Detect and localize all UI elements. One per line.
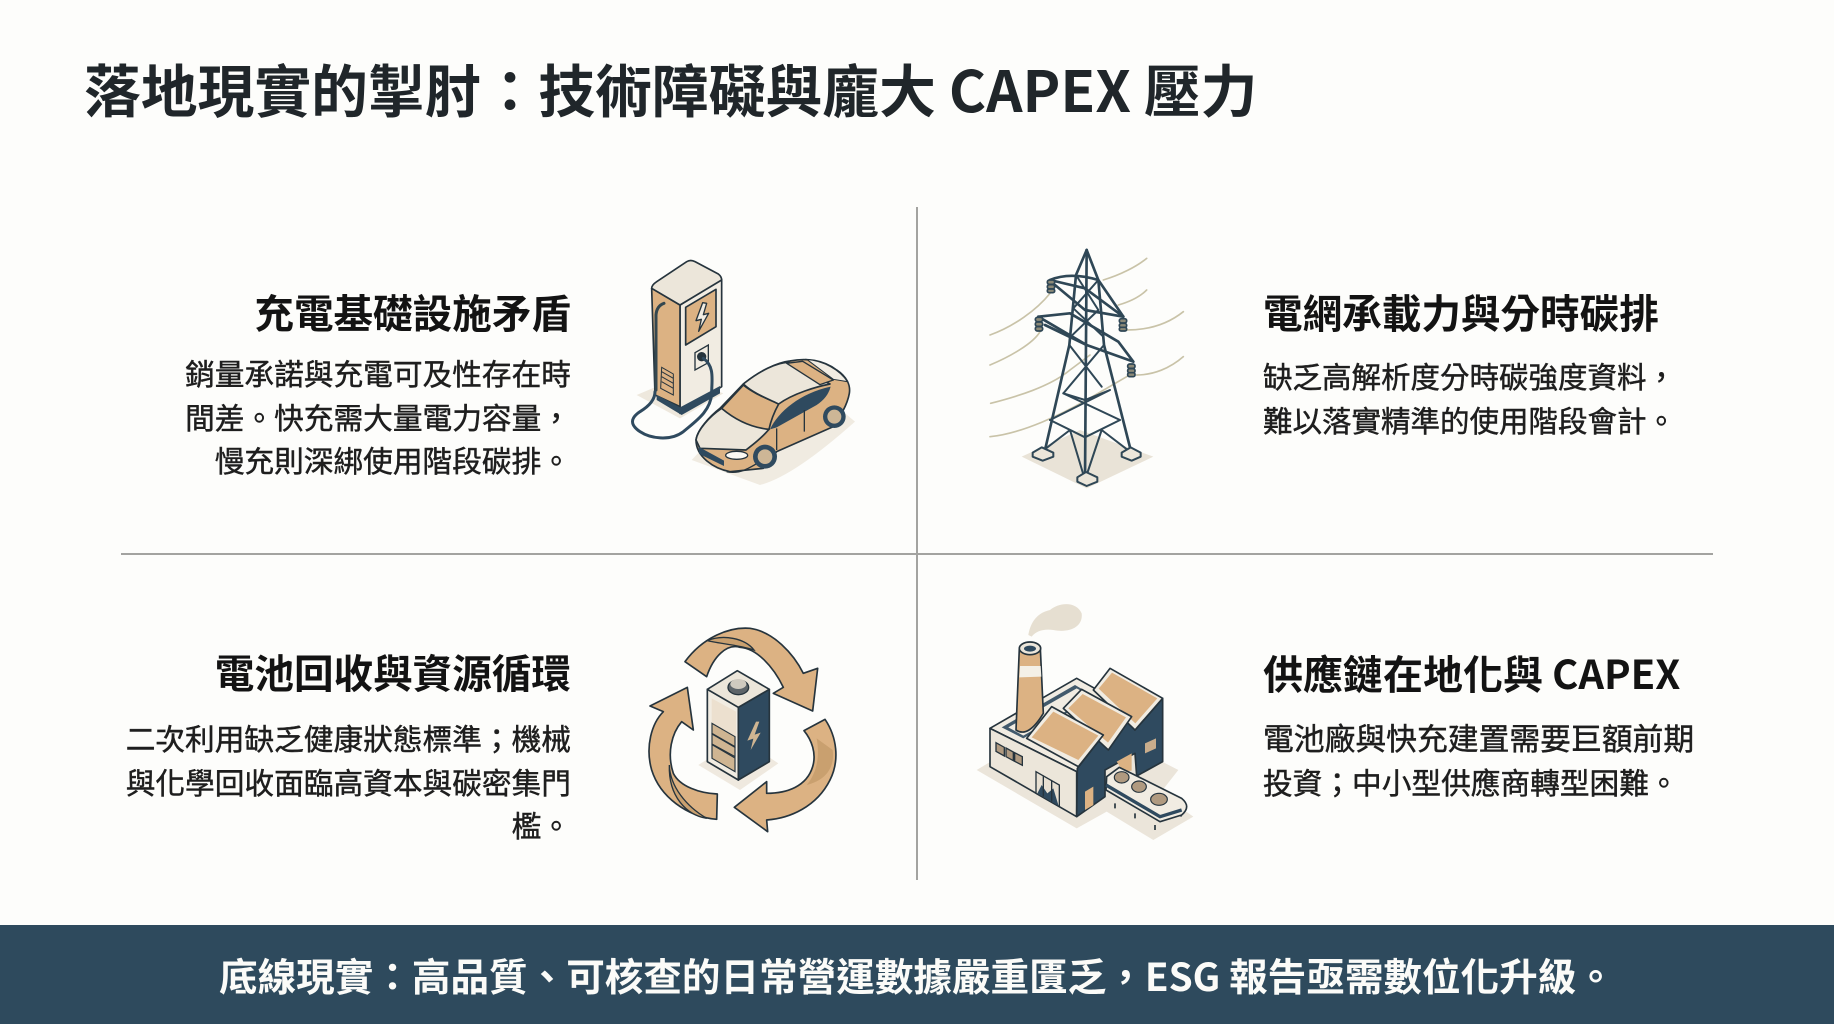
panel: charging infrastructure (185, 260, 855, 485)
text: charging: 間差。快充需大量電力容量， (185, 394, 571, 438)
text: supply chain: 電池廠與快充建置需要巨額前期 (1263, 714, 1694, 759)
text: grid: 難以落實精準的使用階段會計。 (1263, 398, 1676, 440)
text: grid: 缺乏高解析度分時碳強度資料， (1263, 355, 1676, 397)
footer text: 底線現實：高品質、可核查的日常營運數據嚴重匱乏，ESG 報告亟需數位化升級。 (219, 947, 1615, 1003)
vertical divider (916, 207, 918, 880)
heading: supply chain: 供應鏈在地化與 CAPEX (1263, 643, 1680, 701)
panel: supply chain localization (977, 604, 1694, 840)
heading: grid: 電網承載力與分時碳排 (1263, 283, 1659, 340)
text: charging: 慢充則深綁使用階段碳排。 (215, 438, 571, 481)
text: recycling: 與化學回收面臨高資本與碳密集門 (126, 760, 571, 802)
text: recycling (126, 716, 571, 846)
title: 落地現實的掣肘：技術障礙與龐大 CAPEX 壓力 (84, 47, 1257, 129)
text: charging (185, 351, 571, 481)
text: supply chain: 投資；中小型供應商轉型困難。 (1263, 760, 1679, 802)
icon: battery with recycling arrows (648, 627, 837, 832)
footer banner (0, 925, 1834, 1024)
panel: grid capacity (989, 248, 1676, 488)
text: grid (1263, 355, 1676, 440)
text: recycling: 檻。 (512, 803, 571, 846)
text: recycling: 二次利用缺乏健康狀態標準；機械 (126, 716, 571, 759)
heading: recycling: 電池回收與資源循環 (215, 643, 571, 700)
icon: factory with conveyor (977, 604, 1193, 840)
icon: transmission tower (989, 248, 1184, 488)
panel: battery recycling (126, 627, 837, 846)
text: supply chain (1263, 714, 1694, 802)
icon: EV charger and car (631, 260, 855, 485)
heading: charging: 充電基礎設施矛盾 (254, 283, 571, 340)
horizontal divider (121, 553, 1713, 555)
text: charging: 銷量承諾與充電可及性存在時 (185, 351, 571, 394)
